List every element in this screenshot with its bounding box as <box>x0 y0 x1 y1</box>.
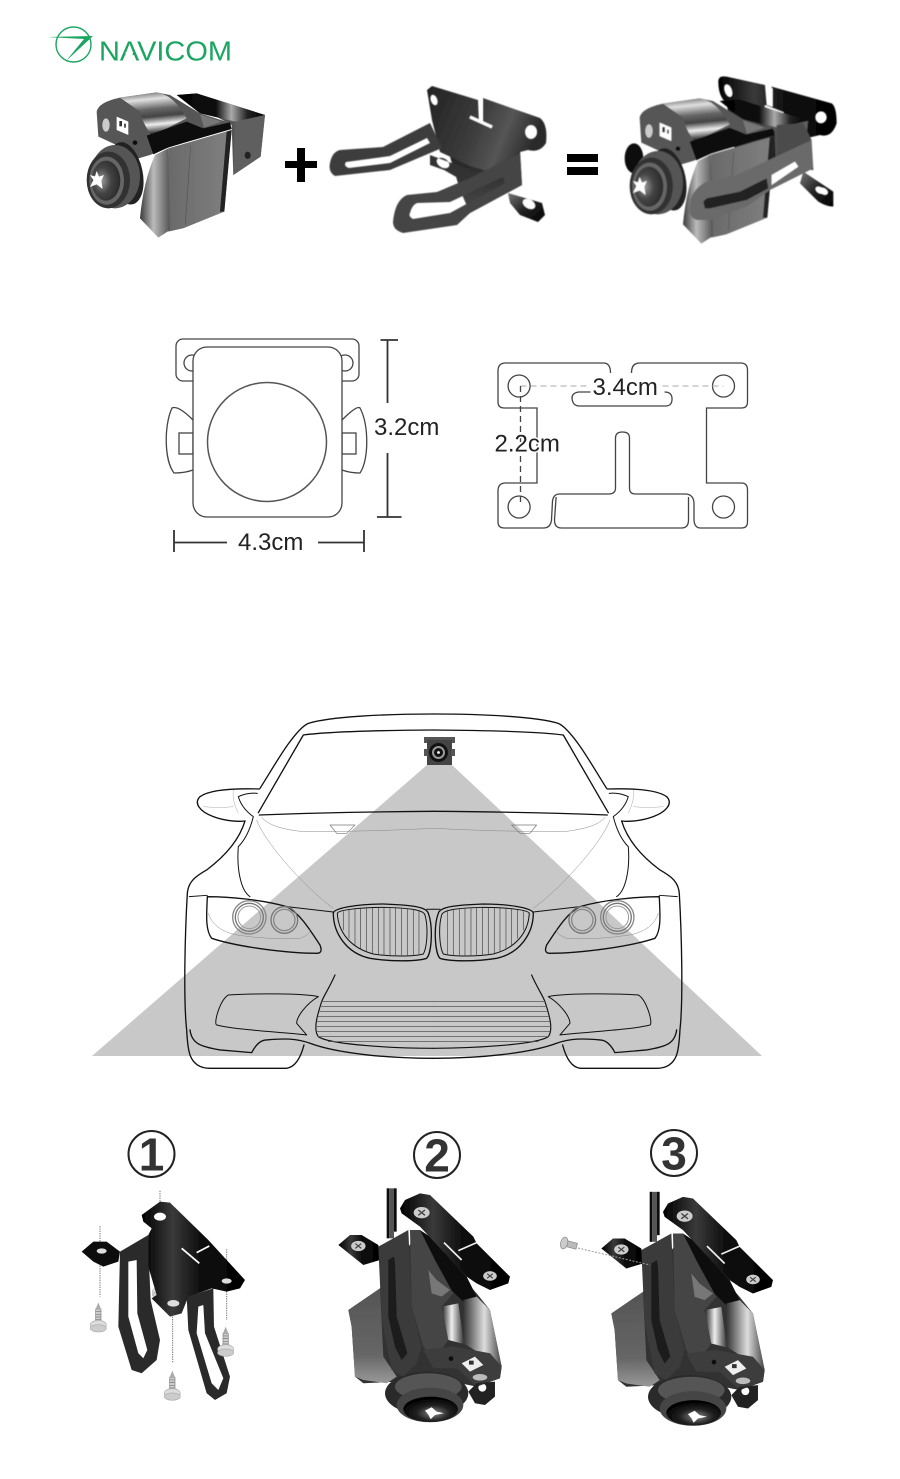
car front view with camera field of view <box>92 714 762 1068</box>
icon: camera on windshield <box>424 737 455 765</box>
logo: NAVICOM <box>47 27 232 66</box>
product row: camera + bracket = assembled <box>87 76 837 244</box>
field of view triangle <box>92 765 762 1056</box>
step 2: camera fixed on bracket <box>338 1130 510 1422</box>
dimension drawing: camera front 4.3cm x 3.2cm <box>166 339 439 556</box>
width dimension <box>174 529 364 556</box>
label: 2.2cm: 2.2cm <box>494 430 560 458</box>
step 1: bracket and screws <box>82 1128 245 1400</box>
icon: mounted camera <box>338 1188 510 1422</box>
spacing dashes <box>520 385 724 387</box>
icon: mounting bracket <box>330 86 546 233</box>
step number 1 <box>128 1128 174 1180</box>
step number 3 <box>651 1128 697 1180</box>
step number 1: 1 <box>139 1128 164 1180</box>
icon: side screw with guide line <box>559 1236 650 1265</box>
height dimension <box>374 340 439 517</box>
car outline <box>185 714 682 1068</box>
bracket outline <box>498 363 748 528</box>
height dimension: 3.2cm <box>374 414 439 441</box>
camera body outline <box>193 347 342 517</box>
step number 3: 3 <box>661 1128 687 1180</box>
icon: assembled camera with bracket <box>625 76 837 244</box>
mounting holes <box>508 375 734 518</box>
equals sign <box>567 154 598 175</box>
label: 3.4cm: 3.4cm <box>592 374 658 401</box>
step number 2: 2 <box>424 1130 450 1182</box>
logo emblem <box>47 27 93 62</box>
mount plate outline <box>176 339 359 381</box>
lens circle <box>208 382 326 502</box>
side ears <box>166 408 367 473</box>
icon: camera <box>87 92 265 238</box>
width dimension: 4.3cm <box>238 529 303 556</box>
logo wordmark: NAVICOM <box>99 36 232 66</box>
step 3: tighten side screw <box>559 1128 773 1426</box>
plus sign <box>285 148 317 182</box>
icon: bracket with four screws <box>82 1191 245 1400</box>
dimension drawing: bracket hole spacing 3.4cm x 2.2cm <box>494 363 748 528</box>
icon: mounted camera <box>601 1192 773 1426</box>
step number 2 <box>414 1130 460 1182</box>
